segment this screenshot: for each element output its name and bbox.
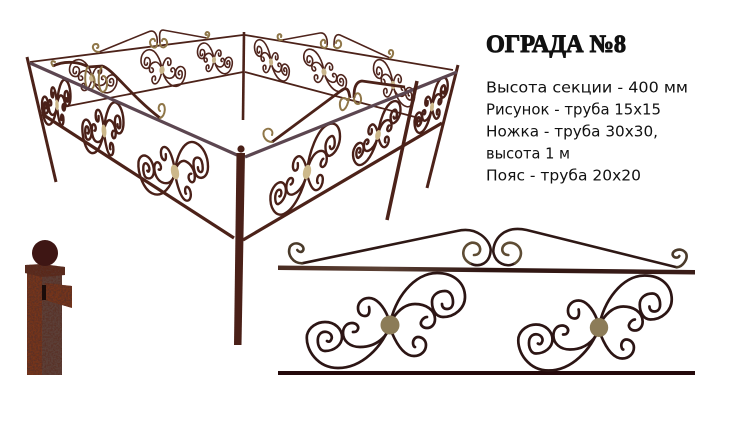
rear corner posts xyxy=(27,57,458,188)
front right post xyxy=(387,81,417,220)
panel: ornamental section detail xyxy=(278,229,695,375)
spec list: Высота секции - 400 мм xyxy=(486,78,688,96)
post side face xyxy=(42,272,62,375)
back posts xyxy=(243,32,244,120)
title: ОГРАДА №8 xyxy=(486,31,626,58)
back rails of fence xyxy=(30,35,453,117)
left scroll xyxy=(307,273,465,368)
ball finial xyxy=(32,240,58,266)
post cap xyxy=(25,264,65,277)
upper rail xyxy=(278,266,695,274)
front section scrolls xyxy=(42,67,448,220)
front left pediment xyxy=(52,61,165,118)
panel: title and specifications xyxy=(486,31,688,184)
spec list: Ножка - труба 30х30, xyxy=(486,122,658,140)
crossbar shadow xyxy=(42,285,46,300)
post front face xyxy=(27,272,42,375)
lower rail xyxy=(278,371,695,375)
spec list: Рисунок - труба 15х15 xyxy=(486,100,661,118)
panel: post close-up xyxy=(25,240,72,375)
back pediments xyxy=(93,30,393,58)
spec list: высота 1 м xyxy=(486,144,570,162)
crossbar xyxy=(45,283,72,308)
front corner post xyxy=(234,145,245,345)
right scroll xyxy=(518,276,672,370)
back section scrolls xyxy=(70,38,415,108)
panel: fence perspective photo xyxy=(27,30,458,345)
pediment frieze xyxy=(289,229,687,267)
front rails xyxy=(30,63,457,240)
front right pediment xyxy=(263,81,405,142)
spec list xyxy=(486,78,688,184)
spec list: Пояс - труба 20х20 xyxy=(486,166,641,184)
